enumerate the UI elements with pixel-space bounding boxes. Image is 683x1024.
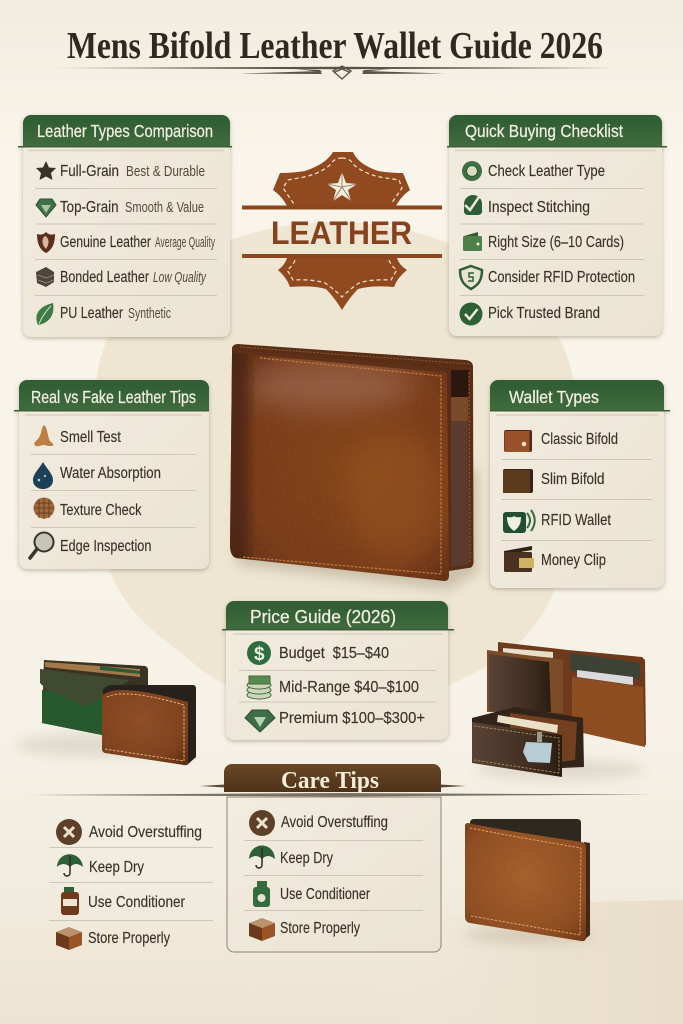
heading text: Real vs Fake Leather Tips <box>31 387 196 407</box>
icon: rfid shield <box>460 266 482 289</box>
heading text: Leather Types Comparison <box>37 121 213 141</box>
floor band <box>380 900 683 1024</box>
badge bottom piece <box>278 258 407 310</box>
badge top piece <box>273 152 410 208</box>
icon: avoid <box>249 810 275 836</box>
text: use conditioner: Use Conditioner <box>88 894 186 911</box>
text: smell test: Smell Test <box>60 429 121 446</box>
open wallets right <box>472 642 646 780</box>
open bifold <box>498 642 646 745</box>
row: genuine leather: Average Quality <box>155 235 215 251</box>
stitching <box>242 358 441 574</box>
panel: care tips center <box>227 797 441 952</box>
text: check leather type: Check Leather Type <box>488 163 605 180</box>
shadow <box>236 470 478 590</box>
icon: diamond <box>245 710 275 732</box>
icon: nose <box>34 425 53 446</box>
text: pick trusted brand: Pick Trusted Brand <box>488 305 600 322</box>
row: pu leather: PU Leather <box>60 305 124 322</box>
icon: green wallet <box>463 232 482 251</box>
icon: star <box>36 161 56 180</box>
icon: rfid wallet <box>503 510 535 533</box>
icon: conditioner bottle <box>253 881 270 907</box>
heading bar <box>490 380 664 410</box>
highlights <box>245 359 415 411</box>
text: budget: Budget $15–$40 <box>279 645 389 662</box>
green and brown wallets left <box>15 660 196 765</box>
text: avoid overstuffing: Avoid Overstuffing <box>281 814 388 831</box>
text: store properly: Store Properly <box>280 920 360 937</box>
panel: leather types comparison <box>18 115 232 337</box>
text: money clip: Money Clip <box>541 552 606 569</box>
row: top-grain: Top-Grain <box>60 199 118 216</box>
heading text: Quick Buying Checklist <box>465 121 623 141</box>
heading bar <box>23 115 230 146</box>
icon: cash stack <box>247 676 271 699</box>
heading text: Wallet Types <box>509 387 599 407</box>
panel: quick buying checklist <box>447 115 667 336</box>
icon: texture swatch <box>34 498 54 519</box>
icon: dollar coin: $ <box>254 644 265 665</box>
panel: real vs fake leather tips <box>14 380 209 569</box>
row: bonded leather: Low Quality <box>153 270 207 286</box>
row: genuine leather: Genuine Leather <box>60 234 152 251</box>
text: use conditioner: Use Conditioner <box>280 886 371 903</box>
brown wallet bottom right <box>465 819 595 943</box>
list: care tips left <box>49 819 213 950</box>
front panel <box>230 350 449 581</box>
icon: magnifier <box>30 532 54 558</box>
icon: star <box>327 172 357 201</box>
leather badge <box>242 152 442 310</box>
text: rfid protection: Consider RFID Protection <box>488 269 635 286</box>
icon: storage box <box>249 918 275 941</box>
icon: water drop <box>33 462 53 489</box>
text: store properly: Store Properly <box>88 930 170 947</box>
text: inspect stitching: Inspect Stitching <box>488 199 590 216</box>
green wallet <box>42 660 148 735</box>
icon: brown shield <box>37 232 55 253</box>
icon: umbrella <box>57 854 83 876</box>
icon: umbrella <box>249 846 275 868</box>
row: full-grain: Full-Grain <box>60 163 119 180</box>
heading bar <box>226 601 448 629</box>
icon: ring <box>462 161 482 181</box>
text: right size: Right Size (6–10 Cards) <box>488 234 624 251</box>
text: keep dry: Keep Dry <box>89 859 144 876</box>
back panel <box>232 344 474 571</box>
text: edge inspection: Edge Inspection <box>60 538 152 555</box>
text: premium: Premium $100–$300+ <box>279 710 425 727</box>
background circle <box>96 222 577 701</box>
icon: green gem <box>36 199 56 217</box>
panel: wallet types <box>490 380 670 588</box>
badge word: LEATHER <box>271 215 412 251</box>
brown wallet <box>103 685 196 765</box>
icon: slim bifold <box>503 469 533 493</box>
row: top-grain <box>60 199 204 216</box>
bars <box>242 206 442 210</box>
care tips divider <box>30 793 650 796</box>
heading text: Price Guide (2026) <box>250 606 396 627</box>
icon: money clip <box>504 546 534 572</box>
icon: avoid <box>56 819 82 845</box>
small dark wallet <box>472 707 584 768</box>
icon: conditioner bottle <box>61 887 79 915</box>
row: bonded leather: Bonded Leather <box>60 269 150 286</box>
text: water absorption: Water Absorption <box>60 465 161 482</box>
text: classic bifold: Classic Bifold <box>541 431 618 448</box>
row: top-grain: Smooth & Value <box>125 200 204 216</box>
care tips banner <box>200 764 466 794</box>
heading bar <box>19 380 209 410</box>
rfid card clip <box>523 732 552 763</box>
text: slim bifold: Slim Bifold <box>541 471 604 488</box>
banner text: Care Tips <box>281 768 379 794</box>
panel: price guide <box>222 601 454 740</box>
main brown bifold wallet <box>225 340 478 590</box>
icon: leaf <box>36 303 53 325</box>
icon: check badge <box>460 302 482 326</box>
text: texture check: Texture Check <box>60 502 142 519</box>
text: mid-range: Mid-Range $40–$100 <box>279 679 419 696</box>
icon: bonded blocks <box>36 267 54 287</box>
icon: dollar coin <box>247 641 271 665</box>
title ornament <box>55 66 615 79</box>
text: rfid wallet: RFID Wallet <box>541 512 611 529</box>
row: full-grain <box>60 163 205 180</box>
heading bar <box>449 115 662 146</box>
icon: stitching check <box>464 195 482 215</box>
row: pu leather: Synthetic <box>128 306 171 322</box>
icon: classic bifold <box>504 430 532 452</box>
text: keep dry: Keep Dry <box>280 850 333 867</box>
icon: storage box <box>56 927 82 950</box>
row: full-grain: Best & Durable <box>126 164 205 180</box>
text: avoid overstuffing: Avoid Overstuffing <box>89 824 202 841</box>
